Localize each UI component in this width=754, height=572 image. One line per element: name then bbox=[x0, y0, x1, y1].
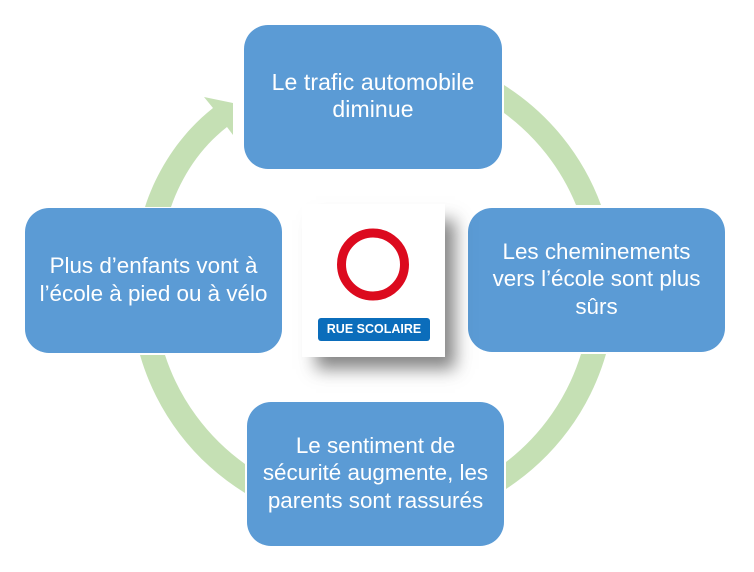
box: safer routes bbox=[468, 208, 725, 352]
box: more children walking or cycling bbox=[25, 208, 282, 353]
icon: red ring bbox=[337, 228, 409, 300]
box: safer routes: sûrs bbox=[575, 294, 618, 319]
box: traffic decreases: Le trafic automobile bbox=[272, 68, 474, 94]
sign: rue scolaire bbox=[302, 204, 445, 357]
arrow: bottom left arc bbox=[140, 355, 245, 493]
box: feeling of safety increases bbox=[247, 402, 504, 546]
arrow: top left arc with head bbox=[145, 97, 233, 207]
label: rue scolaire bbox=[318, 318, 430, 341]
box: traffic decreases: diminue bbox=[332, 96, 414, 122]
box: feeling of safety increases: parents sont rassurés bbox=[268, 488, 483, 513]
box: feeling of safety increases: Le sentiment de bbox=[296, 433, 455, 458]
label: rue scolaire: RUE SCOLAIRE bbox=[327, 322, 421, 336]
box: more children walking or cycling: Plus d’enfants vont à bbox=[50, 253, 257, 278]
box: more children walking or cycling: l’école à pied ou à vélo bbox=[40, 280, 267, 306]
arrow: top right arc bbox=[504, 85, 601, 205]
box: feeling of safety increases: sécurité augmente, les bbox=[263, 460, 488, 485]
box: traffic decreases bbox=[244, 25, 502, 169]
box: safer routes: vers l’école sont plus bbox=[493, 266, 700, 291]
arrow: bottom right arc bbox=[506, 354, 606, 489]
box: safer routes: Les cheminements bbox=[503, 239, 690, 264]
